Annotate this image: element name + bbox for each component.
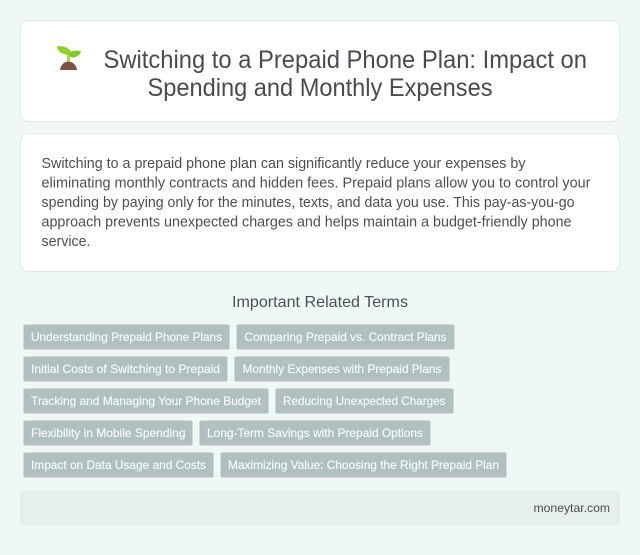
chip: Impact on Data Usage and Costs [31,458,206,472]
footer [20,491,620,525]
chip [236,324,454,350]
text block: description: eliminating monthly contracts and hidden fees. Prepaid plans allow you to control your [42,176,591,192]
chip [220,452,506,478]
chip [200,420,430,446]
chip: Long-Term Savings with Prepaid Options [207,426,423,440]
chip: Tracking and Managing Your Phone Budget [31,394,262,408]
chip: Monthly Expenses with Prepaid Plans [242,362,442,376]
chip [24,420,192,446]
chip [234,356,450,382]
chip [24,452,214,478]
title: Spending and Monthly Expenses [148,74,492,102]
panel: related term chips [24,324,506,478]
chip [24,356,228,382]
text block: description: approach prevents unexpected charges and helps maintain a budget-friendly phone [42,214,572,230]
chip: Maximizing Value: Choosing the Right Prepaid Plan [228,458,499,472]
chip: Initial Costs of Switching to Prepaid [31,362,220,376]
title: Switching to a Prepaid Phone Plan: Impact on [104,46,587,74]
panel: title card [20,20,620,122]
title [104,46,587,102]
chip: Flexibility in Mobile Spending [31,426,186,440]
chip [276,388,454,414]
heading: important related terms: Important Related Terms [232,294,408,311]
text block: description [42,156,591,250]
chip: Comparing Prepaid vs. Contract Plans [244,330,446,344]
chip: Understanding Prepaid Phone Plans [31,330,222,344]
text block: description: service. [42,234,90,250]
icon: seedling [57,46,81,70]
text block: description: spending by paying only for the minutes, texts, and data you use. This pay-as-you-go [42,195,574,211]
text block: description: Switching to a prepaid phone plan can significantly reduce your expenses by [42,156,526,172]
chip [24,324,230,350]
chip [24,388,268,414]
chip: Reducing Unexpected Charges [283,394,446,408]
panel: description [20,134,620,272]
footer source text: moneytar.com [534,501,610,515]
